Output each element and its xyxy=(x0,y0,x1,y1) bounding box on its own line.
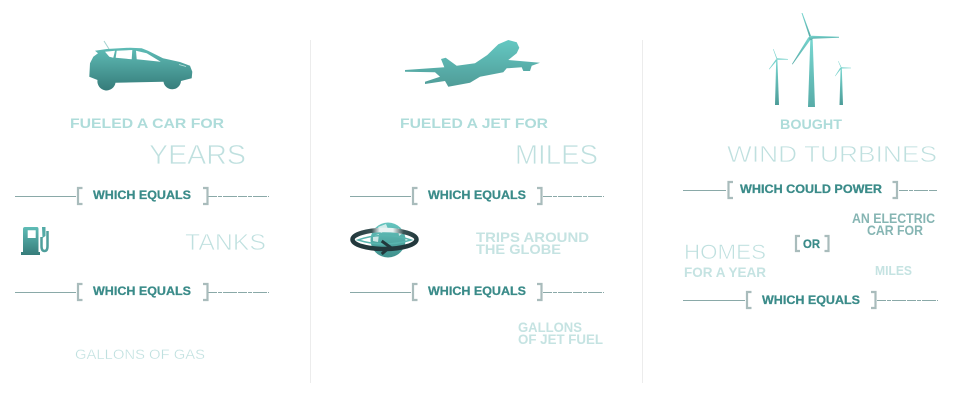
text: gallons of jet fuel: OF JET FUEL xyxy=(518,331,603,347)
divider: which could power: WHICH COULD POWER xyxy=(740,184,883,196)
connector: or xyxy=(796,236,828,251)
divider: which could power xyxy=(683,182,937,198)
text: an electric car for: AN ELECTRIC xyxy=(852,210,935,226)
heading: fueled a car for: FUELED A CAR FOR xyxy=(70,115,224,131)
divider: which equals xyxy=(15,284,269,300)
text: homes for a year xyxy=(684,241,766,280)
icon: airplane xyxy=(405,40,540,87)
label: years: YEARS xyxy=(149,139,246,170)
text: an electric car for: CAR FOR xyxy=(867,222,923,238)
panel: wind xyxy=(683,13,938,308)
text: trips around the globe xyxy=(476,229,589,257)
divider: right xyxy=(642,40,644,383)
heading: fueled a jet for: FUELED A JET FOR xyxy=(400,115,548,131)
divider: which equals xyxy=(350,188,604,204)
icon: globe with orbit xyxy=(352,222,416,258)
icon: fuel pump xyxy=(21,227,48,255)
text: gallons of jet fuel: GALLONS xyxy=(518,319,582,335)
label: gallons of gas: GALLONS OF GAS xyxy=(75,346,205,362)
divider: which equals: WHICH EQUALS xyxy=(428,190,526,202)
divider: which equals xyxy=(683,292,938,308)
text: trips around the globe: TRIPS AROUND xyxy=(476,229,589,245)
divider: which equals: WHICH EQUALS xyxy=(762,295,860,307)
text: gallons of jet fuel xyxy=(518,319,603,347)
label: wind turbines: WIND TURBINES xyxy=(727,141,937,167)
text: homes for a year: HOMES xyxy=(684,241,766,264)
label: miles: MILES xyxy=(875,264,912,278)
panel: jet xyxy=(350,40,604,347)
divider: which equals xyxy=(15,188,269,204)
text: trips around the globe: THE GLOBE xyxy=(476,241,561,257)
panel: car xyxy=(15,41,269,362)
divider: which equals xyxy=(350,284,604,300)
text: an electric car for xyxy=(852,210,935,238)
icon: car xyxy=(89,41,192,90)
text: homes for a year: FOR A YEAR xyxy=(684,264,766,280)
divider: which equals: WHICH EQUALS xyxy=(93,190,191,202)
heading: bought: BOUGHT xyxy=(780,116,842,132)
label: tanks: TANKS xyxy=(185,229,266,255)
divider: which equals: WHICH EQUALS xyxy=(428,286,526,298)
divider: left xyxy=(310,40,312,383)
label: miles: MILES xyxy=(515,139,598,170)
icon: wind turbines xyxy=(769,13,851,107)
connector: or: OR xyxy=(803,239,821,251)
divider: which equals: WHICH EQUALS xyxy=(93,286,191,298)
